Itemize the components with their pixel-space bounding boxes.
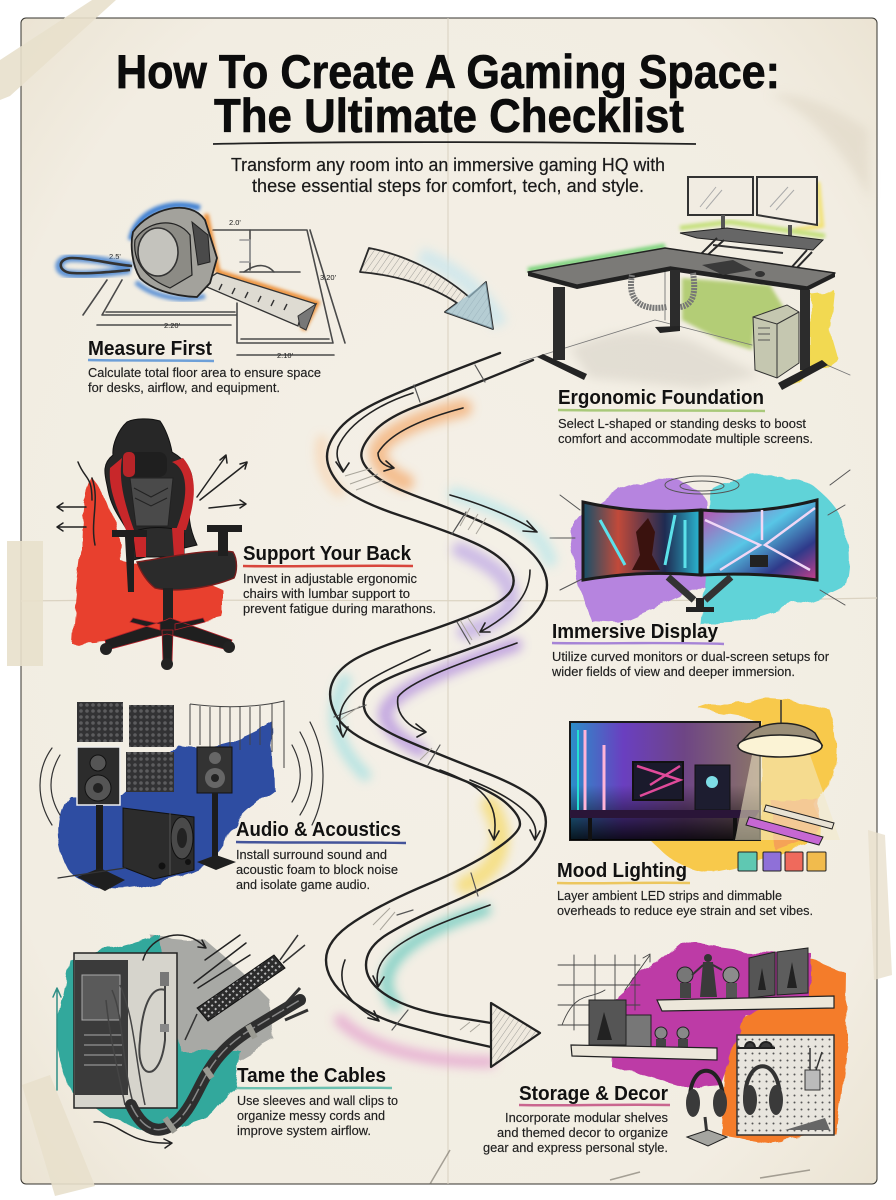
illustration: LED room and ceiling lamp bbox=[570, 700, 840, 872]
winding ribbon arrow bbox=[321, 353, 550, 1067]
subtitle bbox=[231, 155, 665, 196]
illustration: tape measure over floor plan: 2.10' bbox=[277, 351, 294, 360]
illustration: tape measure over floor plan bbox=[59, 205, 345, 360]
title: How To Create A Gaming Space: bbox=[116, 45, 780, 98]
text: immersive display: Utilize curved monitors or dual-screen setups for bbox=[552, 650, 829, 664]
illustration: tape measure over floor plan: 2.0' bbox=[229, 218, 241, 227]
tape: left middle bbox=[7, 541, 43, 666]
illustration: gaming chair with red wash bbox=[57, 419, 247, 670]
colour washes on ribbon bbox=[321, 408, 550, 1062]
text: immersive display bbox=[551, 650, 829, 679]
text: audio and acoustics: Install surround sound and bbox=[236, 848, 387, 862]
ribbon hatching bbox=[340, 468, 486, 1032]
text: audio and acoustics: and isolate game audio. bbox=[236, 878, 370, 892]
heading: storage and decor: Storage & Decor bbox=[519, 1083, 668, 1105]
illustration: speakers and foam bbox=[40, 701, 323, 891]
text: support your back: chairs with lumbar support to bbox=[243, 587, 410, 601]
text: ergonomic foundation: Select L-shaped or standing desks to boost bbox=[558, 417, 807, 431]
text: audio and acoustics: acoustic foam to block noise bbox=[236, 863, 398, 877]
text: ergonomic foundation: comfort and accommodate multiple screens. bbox=[558, 432, 813, 446]
text: ergonomic foundation bbox=[558, 417, 813, 446]
panel: storage and decor bbox=[483, 942, 848, 1155]
panel: measure first bbox=[59, 205, 345, 395]
illustration: tape measure over floor plan: 2.20' bbox=[164, 321, 181, 330]
heading: audio and acoustics: Audio & Acoustics bbox=[236, 819, 401, 841]
text: support your back: prevent fatigue during marathons. bbox=[243, 602, 436, 616]
heading: ergonomic foundation: Ergonomic Foundation bbox=[558, 387, 764, 409]
text: mood lighting: overheads to reduce eye strain and set vibes. bbox=[557, 904, 813, 918]
panel: tame the cables bbox=[53, 935, 398, 1148]
panel: mood lighting bbox=[557, 700, 840, 918]
panel: audio and acoustics bbox=[40, 701, 406, 892]
text: measure first: Calculate total floor area to ensure space bbox=[88, 366, 321, 380]
heading: immersive display: Immersive Display bbox=[552, 621, 719, 643]
illustration: L-shaped standing desk bbox=[520, 177, 850, 390]
text: storage and decor bbox=[483, 1111, 668, 1155]
panel: immersive display bbox=[550, 470, 850, 679]
subtitle: Transform any room into an immersive gaming HQ with bbox=[231, 155, 665, 175]
text: support your back: Invest in adjustable ergonomic bbox=[243, 572, 417, 586]
panel: ergonomic foundation bbox=[520, 177, 850, 446]
ribbon outer edge bbox=[326, 353, 520, 1047]
text: mood lighting bbox=[557, 889, 813, 918]
text: measure first bbox=[88, 366, 321, 395]
illustration: cable management bbox=[53, 935, 308, 1148]
arrow: first step to desk bbox=[360, 248, 500, 329]
text: tame the cables: Use sleeves and wall clips to bbox=[237, 1094, 398, 1108]
text: mood lighting: Layer ambient LED strips and dimmable bbox=[557, 889, 782, 903]
text: immersive display: wider fields of view and deeper immersion. bbox=[551, 665, 795, 679]
text: tame the cables: organize messy cords and bbox=[237, 1109, 385, 1123]
illustration: shelves, figures, pegboard bbox=[558, 942, 848, 1146]
heading: support your back: Support Your Back bbox=[243, 543, 412, 565]
title bbox=[116, 45, 780, 144]
text: tame the cables bbox=[237, 1094, 398, 1138]
tape: bottom left bbox=[22, 1075, 95, 1196]
text: tame the cables: improve system airflow. bbox=[237, 1124, 371, 1138]
text: measure first: for desks, airflow, and equipment. bbox=[88, 381, 280, 395]
text: storage and decor: gear and express personal style. bbox=[483, 1141, 668, 1155]
text: storage and decor: and themed decor to organize bbox=[497, 1126, 668, 1140]
heading: mood lighting: Mood Lighting bbox=[557, 860, 687, 882]
illustration: dual curved monitors bbox=[550, 470, 850, 624]
text: storage and decor: Incorporate modular shelves bbox=[505, 1111, 668, 1125]
illustration: tape measure over floor plan: 3.20' bbox=[320, 273, 337, 282]
ribbon inner edge bbox=[361, 360, 547, 1023]
text: audio and acoustics bbox=[236, 848, 398, 892]
tape: top left bbox=[0, 0, 116, 100]
panel: support your back bbox=[57, 419, 436, 670]
ribbon arrowhead bbox=[491, 1003, 540, 1067]
tape: right edge bbox=[868, 830, 892, 980]
ribbon small inner arrows bbox=[336, 393, 540, 1021]
illustration: tape measure over floor plan: 2.5' bbox=[109, 252, 121, 261]
subtitle: these essential steps for comfort, tech, and style. bbox=[252, 176, 644, 196]
heading: measure first: Measure First bbox=[88, 338, 212, 360]
heading: tame the cables: Tame the Cables bbox=[237, 1065, 386, 1087]
title: The Ultimate Checklist bbox=[214, 89, 684, 142]
ribbon cross stitches bbox=[334, 365, 485, 1030]
text: support your back bbox=[243, 572, 436, 616]
